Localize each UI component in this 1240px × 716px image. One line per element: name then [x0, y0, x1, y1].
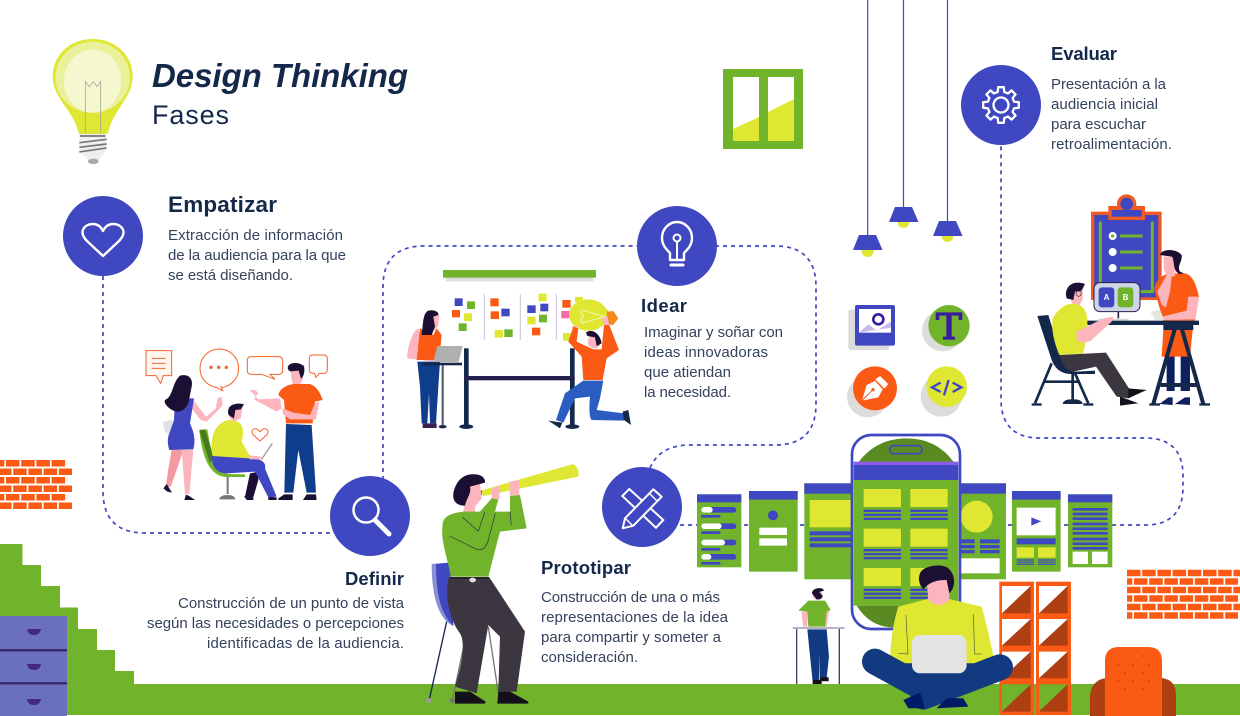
icon: image — [848, 305, 895, 350]
text block prototipar: para compartir y someter a — [541, 629, 722, 646]
text block idear: ideas innovadoras — [644, 344, 768, 361]
heading evaluar: Evaluar — [1051, 43, 1117, 64]
text block evaluar: audiencia inicial — [1051, 96, 1158, 113]
heading prototipar: Prototipar — [541, 557, 631, 578]
heading definir: Definir — [345, 568, 404, 589]
text block empatizar — [168, 227, 346, 284]
text block prototipar: representaciones de la idea — [541, 609, 729, 626]
text block idear: la necesidad. — [644, 384, 731, 401]
icon: magnifier in circle — [330, 476, 410, 556]
orange shelves — [999, 582, 1071, 715]
text block prototipar: Construcción de una o más — [541, 589, 720, 606]
title lightbulb icon — [53, 39, 133, 164]
man with laptop — [875, 566, 1000, 708]
screen 7 — [1068, 494, 1112, 567]
window illustration — [723, 69, 803, 149]
heading idear: Idear — [641, 295, 687, 316]
monitor A/B — [1094, 283, 1140, 320]
text block definir: Construcción de un punto de vista — [178, 595, 405, 612]
seated man — [1032, 283, 1147, 406]
text block evaluar: retroalimentación. — [1051, 136, 1172, 153]
icon: pen nib — [847, 366, 897, 417]
brick wall left — [0, 463, 72, 506]
icon: heart in circle — [63, 196, 143, 276]
dashed connector path — [103, 142, 1183, 533]
text block evaluar — [1051, 76, 1172, 153]
illustration: evaluation with A/B test — [1032, 194, 1210, 406]
brick wall right mask — [1115, 575, 1127, 620]
text block empatizar: se está diseñando. — [168, 267, 293, 284]
screen 2 — [749, 491, 798, 572]
panel: definir — [147, 476, 410, 652]
icons: design tool badges — [847, 305, 970, 417]
text block prototipar: consideración. — [541, 649, 638, 666]
table — [1087, 321, 1210, 406]
monitor A/B: A — [1104, 293, 1110, 302]
title — [152, 57, 408, 130]
icon: text T — [922, 305, 970, 351]
panel: empatizar — [63, 192, 346, 284]
clipboard — [1091, 194, 1162, 300]
text block prototipar — [541, 589, 729, 666]
icon: gear in circle — [961, 65, 1041, 145]
text block definir: según las necesidades o percepciones — [147, 615, 404, 632]
text block evaluar: Presentación a la — [1051, 76, 1167, 93]
screen 1 — [697, 494, 741, 567]
panel: idear — [637, 206, 783, 401]
monitor A/B: B — [1123, 293, 1129, 302]
heading empatizar: Empatizar — [168, 192, 277, 217]
phone — [852, 435, 960, 629]
icon: code — [921, 366, 967, 417]
illustration: prototype screens and people — [697, 435, 1112, 715]
hanging lamps — [853, 0, 962, 257]
text block empatizar: Extracción de información — [168, 227, 343, 244]
text block definir — [147, 595, 405, 652]
text block idear: Imaginar y soñar con — [644, 324, 783, 341]
illustration: ideation board — [407, 270, 631, 429]
text block evaluar: para escuchar — [1051, 116, 1146, 133]
illustration: man with telescope — [426, 464, 579, 704]
text block empatizar: de la audiencia para la que — [168, 247, 346, 264]
title: Fases — [152, 100, 229, 130]
orange armchair — [1090, 647, 1176, 716]
brick wall right — [1119, 573, 1240, 616]
screen 6 — [1012, 491, 1061, 572]
screen 5 — [958, 483, 1006, 579]
ground and stairs — [0, 544, 1240, 715]
icon: pencil and ruler in circle — [602, 467, 682, 547]
small man at table — [793, 588, 845, 684]
text block idear — [644, 324, 783, 401]
panel: prototipar — [541, 467, 729, 666]
text block definir: identificadas de la audiencia. — [207, 635, 404, 652]
drawer cabinet — [0, 616, 67, 716]
panel: evaluar — [961, 43, 1172, 153]
text block idear: que atiendan — [644, 364, 731, 381]
standing woman — [1151, 250, 1199, 405]
illustration: team empathizing — [146, 349, 327, 500]
screen 3 — [804, 483, 854, 579]
icon: lightbulb in circle — [637, 206, 717, 286]
title: Design Thinking — [152, 57, 408, 94]
